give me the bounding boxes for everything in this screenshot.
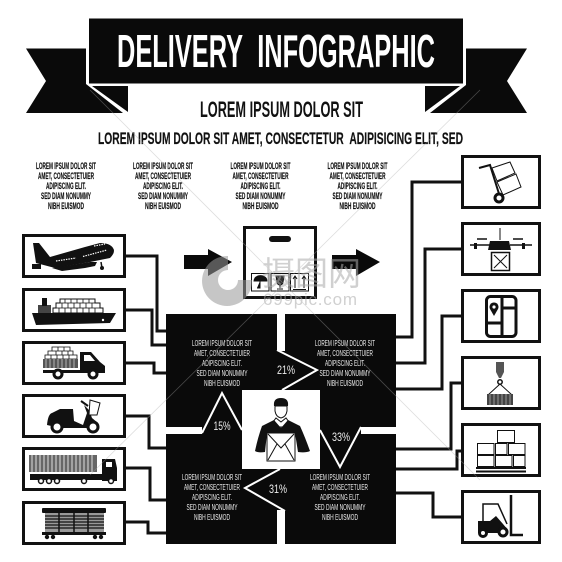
arrow right — [332, 249, 380, 276]
watermark logo — [202, 256, 252, 306]
percent 33: 33% — [332, 430, 350, 444]
text column 1: LOREM IPSUM DOLOR SIT — [36, 161, 96, 171]
ribbon left tail — [26, 48, 123, 113]
centre panels — [166, 314, 396, 544]
panel text top-right: ADIPISCING ELIT. — [325, 358, 365, 368]
ribbon left fold — [92, 86, 128, 112]
text column 2: ADIPISCING ELIT. — [143, 181, 183, 191]
panel text top-right: SED DIAM NONUMMY — [320, 368, 371, 378]
watermark — [90, 90, 480, 480]
panel text bottom-right: ADIPISCING ELIT. — [320, 492, 360, 502]
courier icon — [242, 390, 320, 469]
panel text bottom-right: AMET, CONSECTETUIER — [312, 482, 368, 492]
panel text bottom-right: LOREM IPSUM DOLOR SIT — [310, 472, 370, 482]
right box: crane hook — [462, 358, 540, 408]
text column 1: NIBH EUISMOD — [48, 201, 84, 211]
percent 31: 31% — [269, 482, 287, 496]
ribbon right tail — [430, 48, 527, 113]
text column 1: AMET, CONSECTETUIER — [38, 171, 94, 181]
text column 2: AMET, CONSECTETUIER — [135, 171, 191, 181]
text column 3: LOREM IPSUM DOLOR SIT — [230, 161, 291, 171]
panel text top-left: AMET, CONSECTETUIER — [194, 348, 250, 358]
text column 2: NIBH EUISMOD — [145, 201, 181, 211]
text column 1: ADIPISCING ELIT. — [46, 181, 86, 191]
text column 4 — [328, 161, 388, 211]
right box: pallet of boxes — [462, 424, 540, 476]
text column 1: SED DIAM NONUMMY — [41, 191, 91, 201]
ribbon right fold — [425, 86, 460, 112]
left box: airplane — [24, 236, 124, 276]
panel text bottom-left: ADIPISCING ELIT. — [192, 492, 232, 502]
banner — [26, 18, 527, 113]
right box: hand truck — [462, 156, 540, 208]
panel text bottom-left: LOREM IPSUM DOLOR SIT — [182, 472, 242, 482]
panel text bottom-left: SED DIAM NONUMMY — [186, 502, 238, 512]
panel text top-left — [192, 338, 252, 388]
text column 4: AMET, CONSECTETUIER — [330, 171, 386, 181]
right box: map — [462, 290, 540, 342]
percent 15: 15% — [214, 419, 231, 433]
panel text top-left: LOREM IPSUM DOLOR SIT — [192, 338, 252, 348]
panel text top-left: SED DIAM NONUMMY — [196, 368, 248, 378]
ribbon main — [89, 18, 463, 84]
text column 3: SED DIAM NONUMMY — [236, 191, 286, 201]
text column 2 — [133, 161, 193, 211]
panel text top-left: ADIPISCING ELIT. — [202, 358, 242, 368]
panel text bottom-right — [310, 472, 370, 522]
panel text top-right: LOREM IPSUM DOLOR SIT — [315, 338, 375, 348]
text column 4: SED DIAM NONUMMY — [332, 191, 382, 201]
watermark url: 699pic.com — [263, 290, 357, 309]
panel text bottom-left: AMET, CONSECTETUIER — [184, 482, 240, 492]
text column 4: NIBH EUISMOD — [340, 201, 376, 211]
right box: drone — [462, 224, 540, 274]
text column 4: LOREM IPSUM DOLOR SIT — [328, 161, 388, 171]
left box: truck — [24, 342, 124, 384]
text column 3: NIBH EUISMOD — [242, 201, 279, 211]
text column 2: SED DIAM NONUMMY — [138, 191, 188, 201]
text column 4: ADIPISCING ELIT. — [338, 181, 378, 191]
right box: forklift — [462, 492, 540, 542]
panel text bottom-right: SED DIAM NONUMMY — [314, 502, 366, 512]
connector lines — [126, 182, 461, 533]
panel text bottom-left — [182, 472, 242, 522]
panel text top-right — [315, 338, 375, 388]
percent 21: 21% — [277, 363, 295, 377]
subtitle: LOREM IPSUM DOLOR SIT — [200, 97, 363, 122]
text column 3: AMET, CONSECTETUIER — [232, 171, 289, 181]
panel text bottom-right: NIBH EUISMOD — [322, 512, 358, 522]
text column 2: LOREM IPSUM DOLOR SIT — [133, 161, 193, 171]
left box: container ship — [24, 290, 124, 330]
text column 3: ADIPISCING ELIT. — [240, 181, 280, 191]
panel text top-right: NIBH EUISMOD — [327, 378, 363, 388]
text column 3 — [230, 161, 291, 211]
left box: container truck — [24, 448, 124, 490]
panel text top-right: AMET, CONSECTETUIER — [317, 348, 373, 358]
text column 1 — [36, 161, 96, 211]
arrow left — [184, 249, 232, 276]
left box: scooter — [24, 396, 124, 436]
panel text bottom-left: NIBH EUISMOD — [194, 512, 230, 522]
left box: rail wagon — [24, 502, 124, 544]
parcel box icon — [244, 228, 316, 298]
panel text top-left: NIBH EUISMOD — [204, 378, 240, 388]
watermark cjk: 摄图网 — [262, 255, 361, 292]
